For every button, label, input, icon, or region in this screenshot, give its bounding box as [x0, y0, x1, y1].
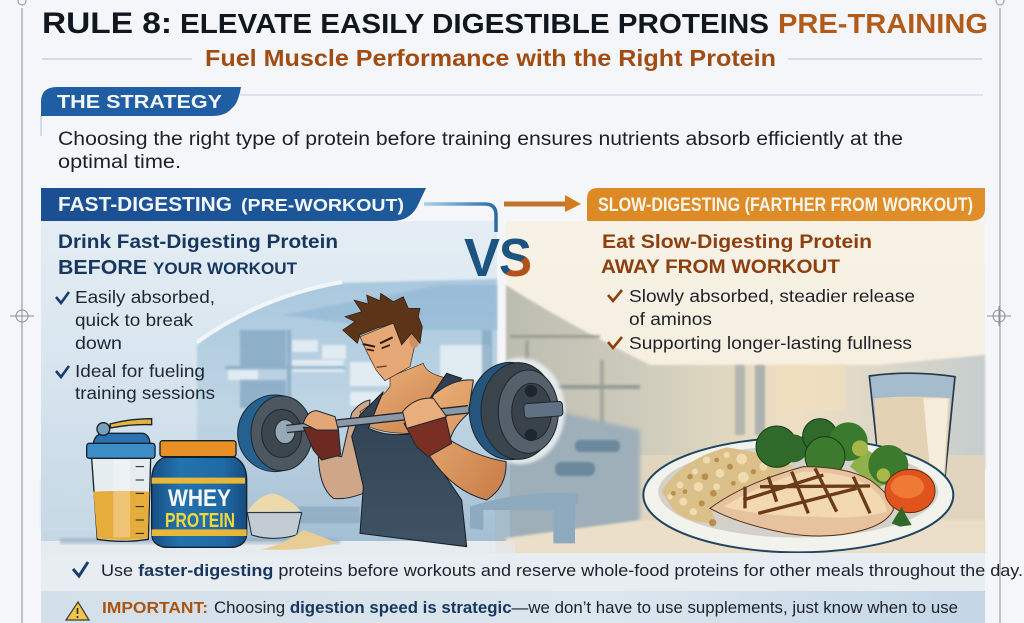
slow-digesting bullets: of aminos [629, 309, 712, 329]
panel: fast-digesting [41, 188, 497, 553]
right plate [469, 362, 558, 460]
fast-digesting bullets: Easily absorbed, [75, 287, 215, 307]
fast-digesting heading: YOUR WORKOUT [153, 260, 297, 278]
left fist [303, 411, 338, 430]
takeaway line [41, 553, 1023, 591]
slow-digesting bullets: Slowly absorbed, steadier release [629, 286, 915, 306]
rice [662, 447, 793, 526]
VS badge: S [499, 228, 532, 288]
whey label: WHEY [168, 485, 231, 512]
fast-digesting header band: (PRE-WORKOUT) [241, 195, 404, 215]
left wrist wrap [303, 427, 341, 460]
plate [643, 438, 953, 552]
fast-digesting header band [41, 188, 426, 221]
slow-digesting heading [601, 231, 872, 278]
title: RULE 8: [42, 7, 172, 40]
VS badge [464, 228, 532, 288]
fast-digesting bullets: down [75, 333, 122, 353]
glass of milk [869, 373, 955, 477]
icon: check [608, 290, 622, 301]
subtitle: Fuel Muscle Performance with the Right Protein [205, 45, 776, 71]
important callout [41, 591, 985, 623]
right arm [420, 380, 506, 500]
white halo behind plate [475, 358, 565, 464]
left panel background [41, 221, 497, 553]
title: ELEVATE EASILY DIGESTIBLE PROTEINS [180, 8, 769, 39]
right wrist wrap [404, 415, 452, 457]
strategy text: Choosing the right type of protein before training ensures nutrients absorb efficiently at the [58, 129, 903, 150]
fast-digesting bullets: quick to break [75, 310, 193, 330]
whey jar [152, 441, 247, 547]
important callout: IMPORTANT: [102, 600, 208, 617]
fast-digesting bullets: Ideal for fueling [75, 361, 205, 381]
panel: the strategy [41, 87, 983, 173]
title [42, 7, 988, 40]
right panel background [495, 221, 985, 553]
fast-digesting header band: FAST-DIGESTING [58, 194, 232, 216]
strategy text [58, 129, 903, 173]
brow and eyes [363, 337, 393, 347]
icon: check [73, 562, 88, 576]
fast-digesting bullets: training sessions [75, 383, 215, 403]
slow-digesting header band [587, 188, 985, 221]
icon: check [608, 337, 622, 348]
barbell bar [287, 409, 468, 429]
whey label [165, 485, 235, 532]
important callout: Choosing digestion speed is strategic —we don’t have to use supplements, just know when to use [214, 599, 958, 617]
strategy text: optimal time. [58, 152, 181, 173]
slow-digesting bullets [608, 286, 915, 353]
VS badge: V [464, 228, 500, 288]
broccoli [756, 419, 908, 488]
illustration: athlete with barbell [238, 293, 578, 547]
shaker bottle [87, 419, 155, 541]
left plate [238, 395, 312, 472]
icon: warning triangle [66, 602, 89, 620]
ear [409, 331, 419, 348]
bench behind [470, 493, 578, 543]
slow-digesting heading: AWAY FROM WORKOUT [601, 257, 840, 278]
heading tab: the strategy [41, 87, 241, 116]
tomato [885, 469, 935, 513]
title: PRE-TRAINING [778, 8, 988, 39]
illustration: shaker, whey jar and powder [87, 419, 337, 550]
face [360, 322, 417, 381]
arrow: blue connector [424, 204, 496, 232]
tank top [352, 373, 467, 547]
spilled powder [262, 530, 337, 550]
fast-digesting bullets [56, 287, 215, 403]
heading tab: the strategy: THE STRATEGY [57, 91, 223, 112]
slow-digesting bullets: Supporting longer-lasting fullness [629, 333, 912, 353]
chicken breast [710, 467, 893, 536]
neck and chest [360, 363, 460, 433]
illustration: meal plate and milk glass [643, 373, 955, 552]
icon: check [56, 366, 69, 377]
fast-digesting heading [58, 231, 338, 279]
herb garnish [892, 507, 912, 527]
fast-digesting heading: Drink Fast-Digesting Protein [58, 231, 338, 253]
takeaway line: Use faster-digesting proteins before workouts and reserve whole-food proteins for other meals throughout the day. [101, 561, 1023, 580]
panel: slow-digesting [495, 188, 985, 553]
left arm [318, 400, 370, 499]
arrow: orange [504, 195, 581, 212]
whey label: PROTEIN [165, 510, 235, 532]
slow-digesting heading: Eat Slow-Digesting Protein [602, 231, 872, 253]
icon: check [56, 292, 69, 303]
powder bowl [247, 493, 302, 538]
fast-digesting heading: BEFORE [58, 257, 147, 279]
hair [343, 293, 422, 345]
right fist [403, 398, 447, 428]
